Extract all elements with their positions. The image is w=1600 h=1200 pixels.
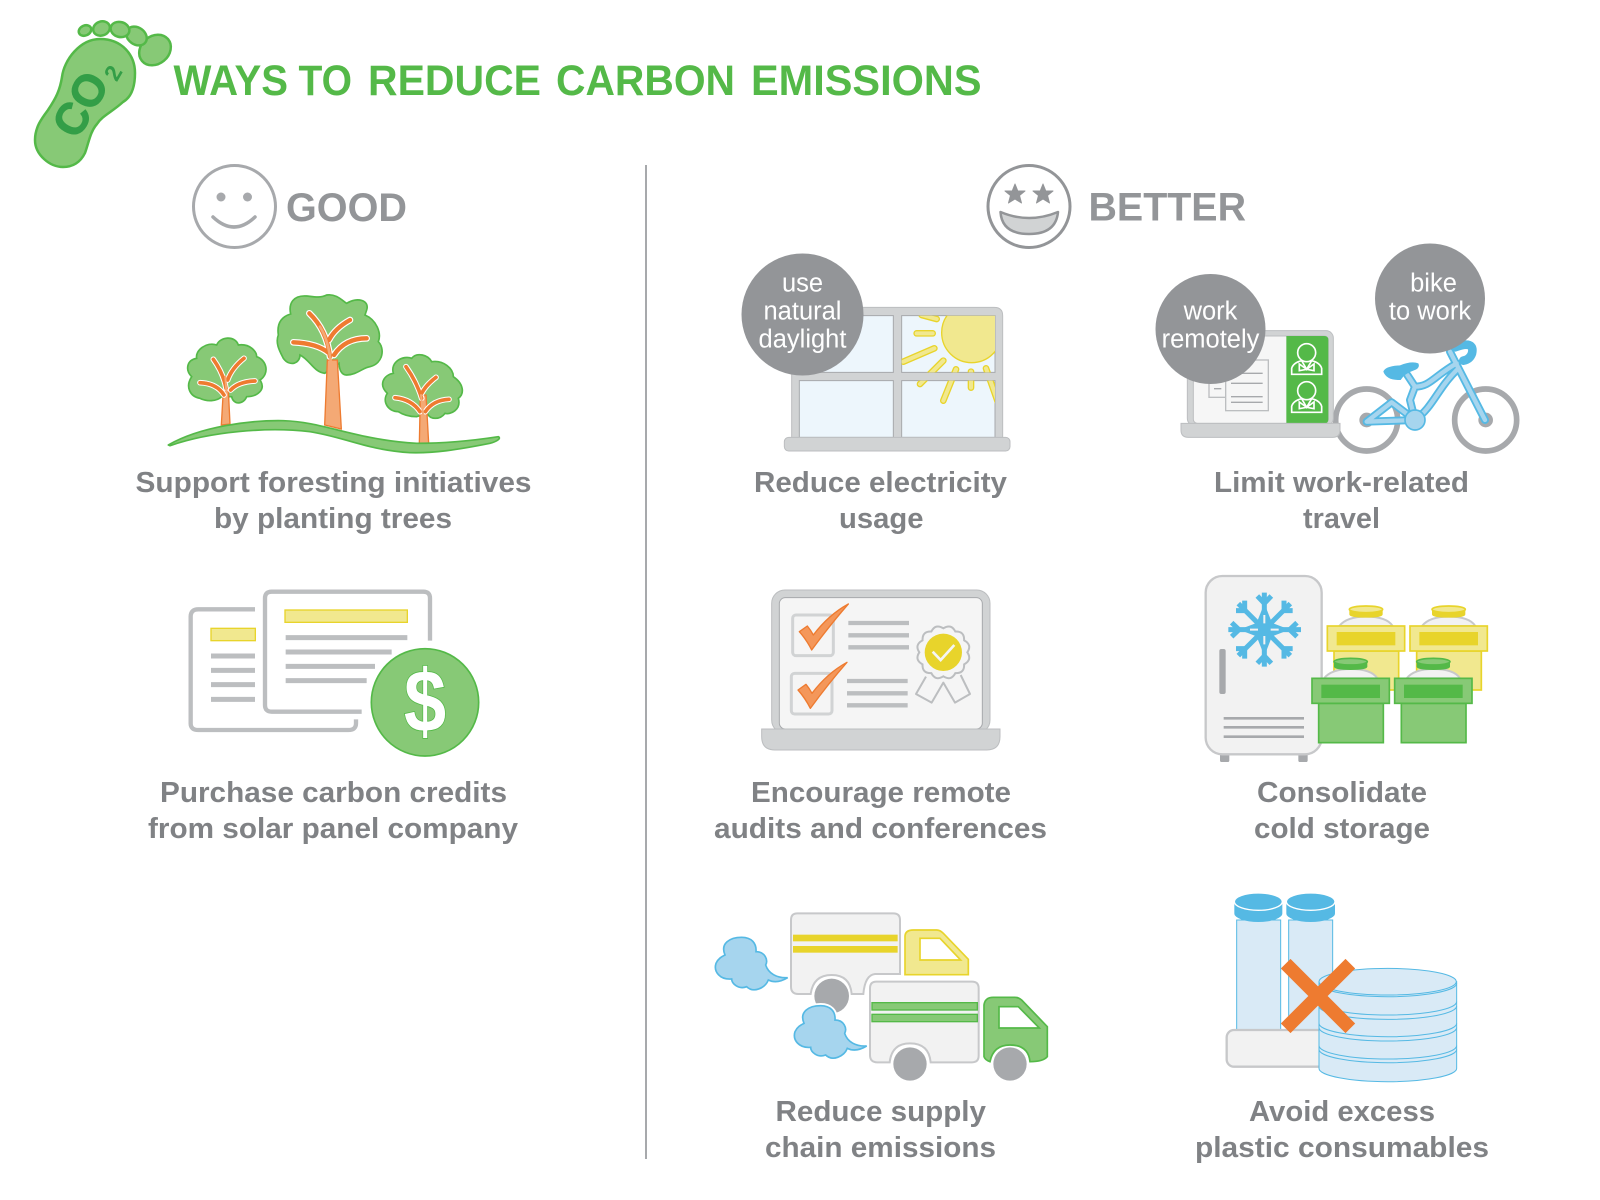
panel: reduce electricity [742, 254, 1010, 535]
callout: use natural daylight: daylight [759, 326, 846, 354]
caption [1254, 777, 1430, 845]
title: EMISSIONS [751, 57, 982, 105]
heading: GOOD column [194, 166, 407, 248]
caption: Consolidate [1257, 777, 1427, 809]
caption: audits and conferences [714, 813, 1047, 845]
caption: chain emissions [765, 1132, 996, 1164]
panel: consolidate cold storage [1206, 576, 1487, 845]
heading: GOOD column: GOOD [286, 186, 407, 230]
caption: Reduce supply [776, 1096, 986, 1128]
caption: Avoid excess [1249, 1096, 1435, 1128]
illustration: delivery trucks with exhaust clouds [715, 913, 1047, 1081]
caption [136, 467, 532, 535]
illustration: laptop and bicycle [1181, 331, 1517, 451]
callout: use natural daylight [742, 254, 864, 376]
panel: supply chain emissions [715, 913, 1047, 1164]
panel: planting trees [136, 295, 532, 535]
caption: usage [839, 503, 924, 535]
icon: CO2 footprint: 2 [99, 61, 127, 85]
illustration: tubes, tray and dishes crossed out [1227, 893, 1457, 1082]
yellow bottle boxes [1327, 606, 1487, 690]
callout: work remotely: work [1183, 298, 1238, 326]
illustration: laptop with checklist and rosette [762, 590, 1000, 750]
caption: Reduce electricity [754, 467, 1007, 499]
caption: by planting trees [214, 503, 452, 535]
panel: plastic consumables [1195, 893, 1489, 1164]
title: CARBON [556, 57, 735, 105]
callout: bike to work: to work [1389, 298, 1471, 326]
panel: remote audits [714, 590, 1047, 845]
title: TO [298, 57, 352, 105]
panel: carbon credits [148, 592, 518, 845]
caption: Support foresting initiatives [136, 467, 532, 499]
caption: Encourage remote [751, 777, 1011, 809]
illustration: three trees on a hill [168, 295, 499, 453]
caption [754, 467, 1007, 535]
green bottle boxes [1312, 658, 1472, 743]
caption [1214, 467, 1469, 535]
caption: from solar panel company [148, 813, 518, 845]
callout: use natural daylight: natural [764, 298, 841, 326]
heading: BETTER column: BETTER [1088, 186, 1246, 230]
heading: BETTER column [988, 166, 1246, 248]
caption: Limit work-related [1214, 467, 1469, 499]
illustration: window with sun [784, 303, 1010, 451]
callout: work remotely [1156, 274, 1266, 384]
icon: CO2 footprint: CO [42, 63, 119, 146]
title: WAYS [174, 57, 288, 105]
panel: limit work-related travel [1156, 244, 1517, 535]
title: REDUCE [368, 57, 541, 105]
caption: cold storage [1254, 813, 1430, 845]
caption [765, 1096, 996, 1164]
illustration: freezer and boxed bottles [1206, 576, 1487, 762]
caption [148, 777, 518, 845]
icon: CO2 footprint [35, 19, 177, 167]
illustration: documents with dollar coin: $ [404, 652, 446, 751]
callout: bike to work: bike [1410, 270, 1457, 298]
illustration: documents with dollar coin [191, 592, 482, 759]
divider line between columns [645, 165, 647, 1159]
callout: use natural daylight: use [782, 270, 823, 298]
caption: plastic consumables [1195, 1132, 1489, 1164]
caption [714, 777, 1047, 845]
callout: bike to work [1375, 244, 1485, 354]
callout: work remotely: remotely [1162, 326, 1260, 354]
title [174, 57, 982, 105]
caption: Purchase carbon credits [160, 777, 507, 809]
caption: travel [1303, 503, 1380, 535]
caption [1195, 1096, 1489, 1164]
